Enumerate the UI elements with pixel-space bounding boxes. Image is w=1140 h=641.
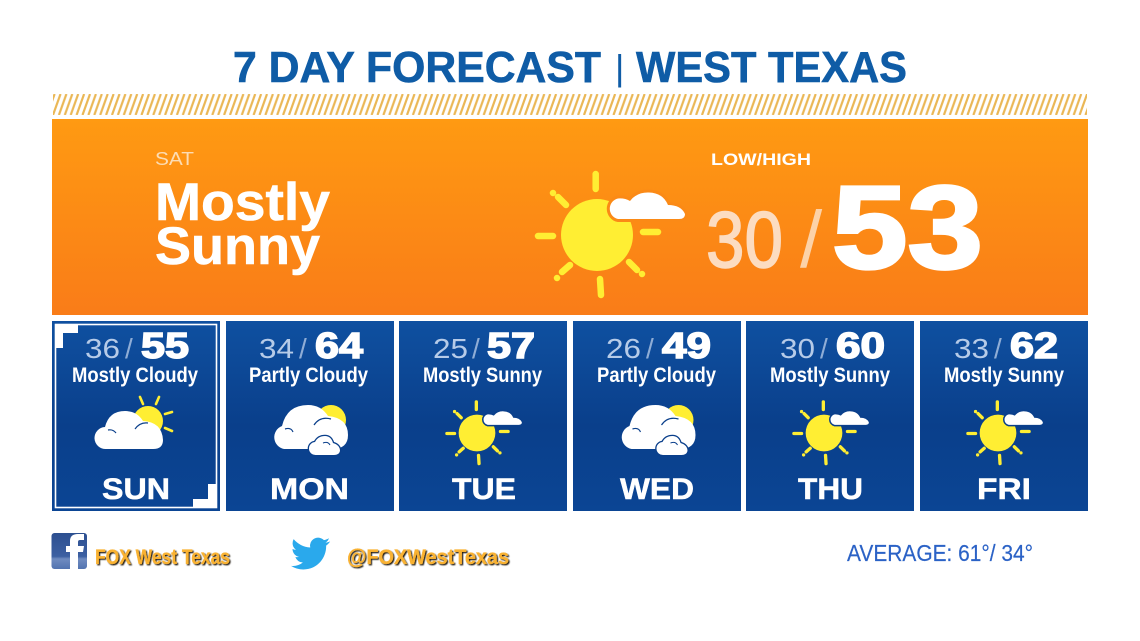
temperatures: 25 (433, 333, 468, 364)
title (233, 43, 907, 92)
temperature separator: / (800, 195, 823, 284)
temperatures: 33 (954, 333, 989, 364)
today condition: Mostly (155, 173, 331, 232)
temperatures: 64 (315, 325, 363, 366)
condition: Mostly Sunny (944, 364, 1064, 387)
temperatures: 60 (836, 325, 885, 366)
day label: FRI (977, 473, 1031, 506)
icon: large sun with cloud (538, 174, 685, 295)
today condition (155, 173, 331, 276)
panel: today forecast (52, 119, 1088, 315)
temperatures (780, 325, 885, 366)
condition: Partly Cloudy (249, 364, 368, 387)
temperatures: / (472, 333, 480, 364)
panel: Sunday (52, 321, 220, 511)
temperatures (954, 325, 1058, 366)
icon: sun with cloud (968, 402, 1043, 464)
temperatures (85, 325, 189, 366)
temperatures: 57 (487, 325, 535, 366)
condition: Mostly Cloudy (72, 364, 198, 387)
day label: WED (620, 473, 694, 506)
temperatures: 30 (780, 333, 815, 364)
facebook account: FOX West Texas (95, 546, 230, 569)
icon: partly cloudy (622, 405, 696, 455)
temperatures: 34 (259, 333, 294, 364)
hatched stripe band (53, 94, 1087, 115)
temperatures: 55 (141, 325, 189, 366)
day label: MON (270, 473, 349, 506)
panel: Friday (920, 321, 1088, 511)
title: | (615, 47, 624, 88)
condition: Mostly Sunny (423, 364, 542, 387)
temperatures: / (125, 333, 133, 364)
temperatures: 49 (662, 325, 711, 366)
panel: Tuesday (399, 321, 567, 511)
low/high label: LOW/HIGH (711, 150, 811, 169)
today condition: Sunny (155, 217, 321, 276)
temperatures: / (299, 333, 307, 364)
today high temperature: 53 (832, 162, 983, 294)
panel: Monday (226, 321, 394, 511)
average temperatures: AVERAGE: 61°/ 34° (847, 540, 1033, 566)
icon: sun with cloud (447, 402, 522, 464)
icon: facebook (52, 533, 87, 569)
temperatures (259, 325, 363, 366)
condition: Mostly Sunny (770, 364, 890, 387)
temperatures: / (994, 333, 1002, 364)
temperatures (606, 325, 711, 366)
temperatures: 26 (606, 333, 641, 364)
day label: TUE (452, 473, 516, 506)
icon: twitter bird (291, 538, 330, 569)
today low temperature: 30 (706, 195, 783, 284)
temperatures (433, 325, 535, 366)
panel: Thursday (746, 321, 914, 511)
twitter account: @FOXWestTexas (347, 546, 509, 569)
temperatures: 36 (85, 333, 120, 364)
icon: partly cloudy (274, 405, 348, 455)
day label: THU (798, 473, 863, 506)
temperatures: 62 (1010, 325, 1058, 366)
title: 7 DAY FORECAST (233, 43, 601, 92)
panel: Wednesday (573, 321, 741, 511)
temperatures: / (646, 333, 654, 364)
icon: sun with cloud (794, 402, 869, 464)
condition: Partly Cloudy (597, 364, 716, 387)
day label: SUN (102, 473, 170, 506)
icon: cloud with sun (94, 397, 172, 449)
temperatures: / (820, 333, 828, 364)
today day label: SAT (155, 149, 194, 169)
title: WEST TEXAS (636, 43, 907, 92)
selection frame (56, 324, 216, 508)
